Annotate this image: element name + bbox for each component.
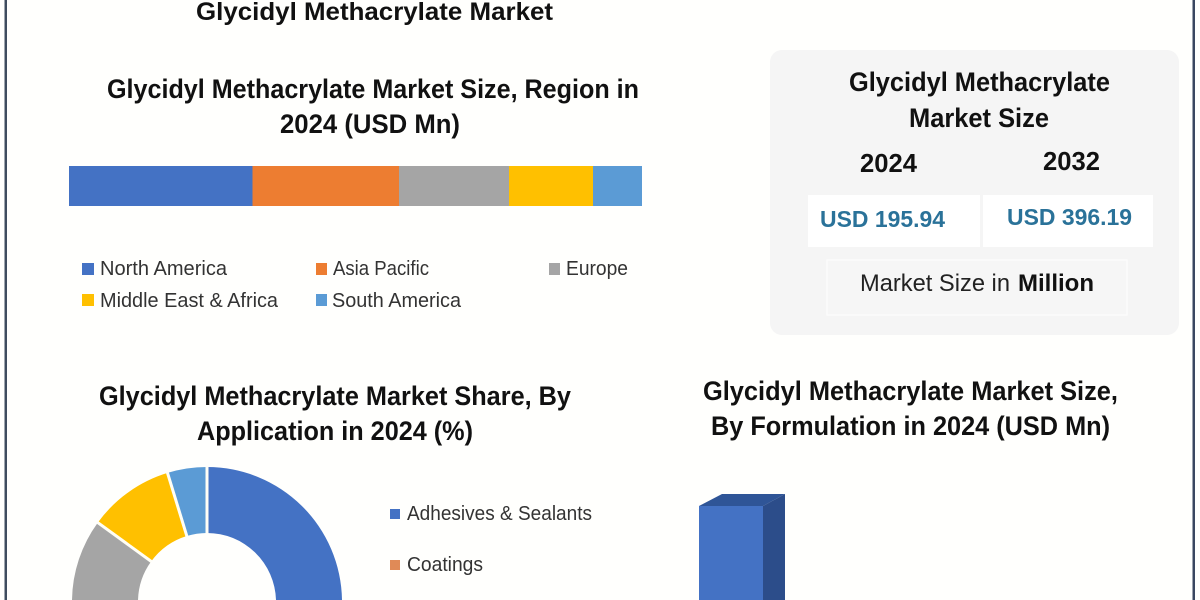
panel: market size by formulation bbox=[699, 376, 1118, 600]
heading: market size bbox=[849, 67, 1110, 133]
heading: market size: Market Size bbox=[909, 103, 1049, 133]
heading: market size: Glycidyl Methacrylate bbox=[849, 67, 1110, 97]
heading: application chart: Glycidyl Methacrylate Market Share, By bbox=[99, 381, 571, 411]
unit note box: Market Size in bbox=[860, 270, 1010, 297]
legend: applications bbox=[390, 503, 592, 576]
heading: region chart: 2024 (USD Mn) bbox=[280, 109, 460, 139]
panel: market share by application bbox=[72, 381, 592, 600]
value box 2032: USD 396.19 bbox=[1007, 204, 1132, 230]
legend: regions: Middle East & Africa bbox=[100, 290, 279, 312]
value box 2024 bbox=[808, 195, 980, 247]
panel: market size card bbox=[770, 50, 1179, 335]
unit note box: Million bbox=[1018, 270, 1094, 297]
year label 2032: 2032 bbox=[1043, 146, 1100, 176]
heading: formulation chart: Glycidyl Methacrylate Market Size, bbox=[703, 376, 1118, 406]
donut chart bbox=[72, 466, 342, 600]
legend: regions: North America bbox=[100, 258, 228, 280]
legend: regions: Asia Pacific bbox=[333, 258, 429, 280]
value box 2024: USD 195.94 bbox=[820, 206, 945, 232]
legend: regions bbox=[82, 258, 628, 312]
legend: applications: Coatings bbox=[407, 554, 483, 576]
legend: regions: Europe bbox=[566, 258, 628, 280]
heading: formulation chart bbox=[703, 376, 1118, 441]
heading: application chart: Application in 2024 (%) bbox=[197, 416, 473, 446]
3D bar chart bbox=[699, 494, 785, 600]
legend: regions: South America bbox=[332, 290, 462, 312]
stacked bar chart bbox=[69, 166, 642, 206]
value box 2032 bbox=[983, 195, 1153, 247]
heading: region chart: Glycidyl Methacrylate Market Size, Region in bbox=[107, 74, 639, 104]
heading: region chart bbox=[107, 74, 639, 139]
heading: formulation chart: By Formulation in 2024 (USD Mn) bbox=[711, 411, 1110, 441]
legend: applications: Adhesives & Sealants bbox=[407, 503, 592, 525]
panel: market size by region bbox=[69, 74, 642, 312]
heading: application chart bbox=[99, 381, 571, 446]
year label 2024: 2024 bbox=[860, 148, 918, 178]
unit note box bbox=[827, 260, 1127, 315]
